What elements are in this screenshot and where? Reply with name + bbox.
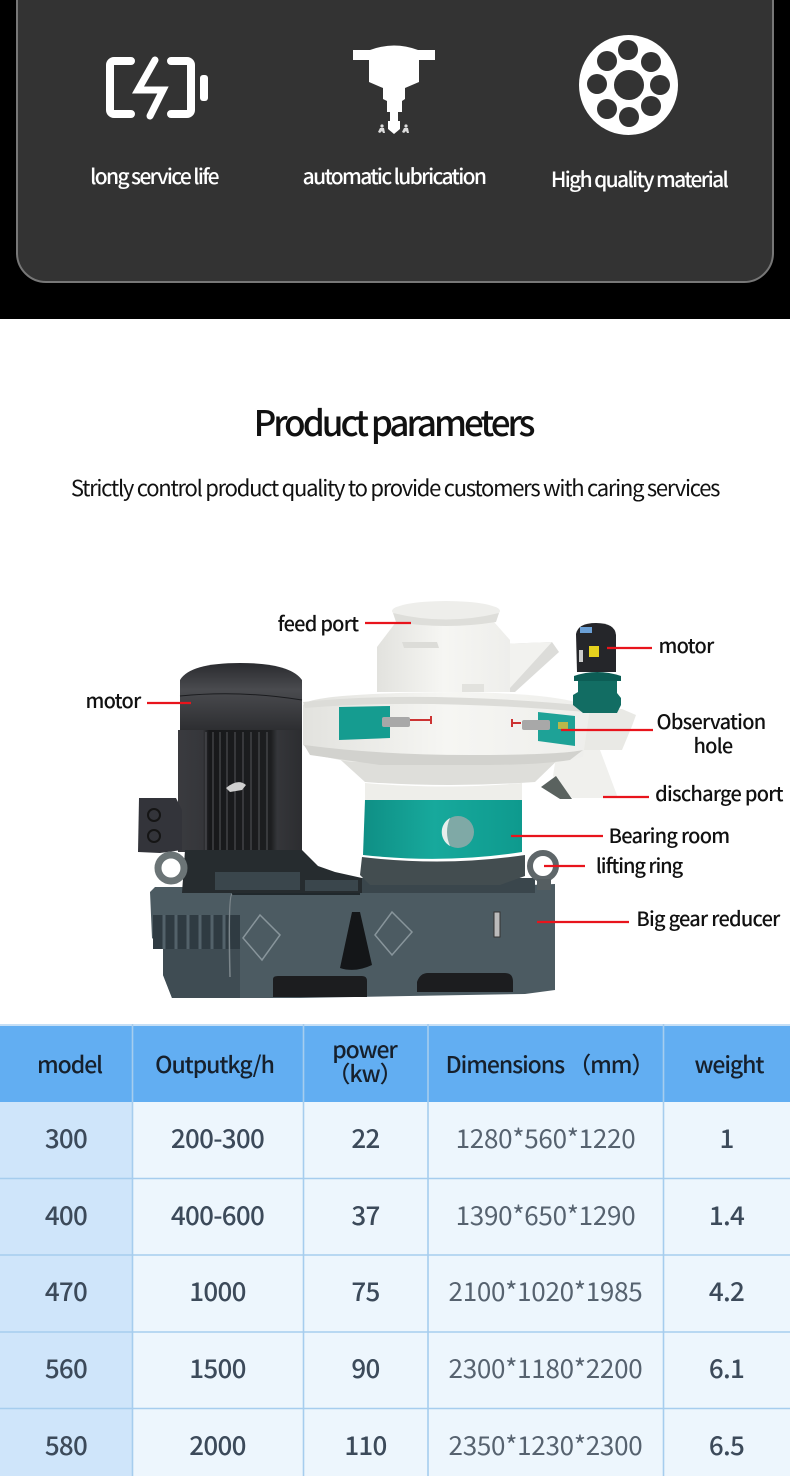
parameter table: 1390*650*1290 xyxy=(456,1196,635,1233)
callout: motor right: motor xyxy=(658,630,714,659)
parameter table: 2350*1230*2300 xyxy=(449,1426,642,1463)
parameter table: 110 xyxy=(344,1426,387,1463)
parameter table: 22 xyxy=(351,1119,380,1156)
parameter table: weight xyxy=(695,1046,763,1080)
parameter table: 200-300 xyxy=(171,1119,264,1156)
table grid xyxy=(0,1024,790,1476)
machine illustration xyxy=(138,601,636,998)
label: high quality material: High quality material xyxy=(551,164,727,194)
row 560: 560 xyxy=(45,1349,87,1386)
grinding chamber xyxy=(303,601,636,804)
parameter table: 2000 xyxy=(189,1426,246,1463)
callout: big gear reducer: Big gear reducer xyxy=(636,903,780,932)
callout: feed port: feed port xyxy=(278,608,358,637)
callout lines xyxy=(147,622,653,924)
callout: lifting ring: lifting ring xyxy=(596,850,682,879)
parameter table: Outputkg/h xyxy=(155,1046,274,1080)
callout: observation hole: Observation xyxy=(656,706,765,735)
small motor xyxy=(573,623,621,713)
dark feature section xyxy=(0,0,790,319)
row 400: 400 xyxy=(45,1196,87,1233)
parameter table: 6.5 xyxy=(709,1426,744,1463)
parameter table: 75 xyxy=(351,1272,380,1309)
row 300: 300 xyxy=(45,1119,87,1156)
parameter table: 37 xyxy=(351,1196,380,1233)
callout: observation hole: hole xyxy=(694,730,732,759)
parameter table: 1 xyxy=(719,1119,734,1156)
icon: lubrication pump xyxy=(353,46,435,134)
parameter table: 2100*1020*1985 xyxy=(449,1272,642,1309)
callout: bearing room: Bearing room xyxy=(609,820,729,849)
gear reducer base xyxy=(150,878,555,998)
first column xyxy=(0,1102,132,1476)
row 580: 580 xyxy=(45,1426,87,1463)
bearing room xyxy=(360,800,556,890)
row 470: 470 xyxy=(45,1272,87,1309)
parameter table: Dimensions （mm） xyxy=(446,1046,653,1080)
label: long service life: long service life xyxy=(90,161,218,191)
header cells: model xyxy=(37,1046,102,1080)
subheading: Strictly control product quality to provide customers with caring services xyxy=(71,471,719,503)
icon: battery xyxy=(106,56,208,120)
parameter table: 400-600 xyxy=(171,1196,264,1233)
parameter table: （kw） xyxy=(327,1055,402,1089)
callout: motor left: motor xyxy=(85,685,140,714)
label: automatic lubrication: automatic lubrication xyxy=(303,161,485,191)
parameter table xyxy=(0,1024,790,1476)
parameter table: power xyxy=(332,1031,397,1065)
callout: observation hole xyxy=(656,706,765,759)
parameter table: 1500 xyxy=(189,1349,246,1386)
parameter table: 1.4 xyxy=(709,1196,744,1233)
callout: discharge port: discharge port xyxy=(655,778,783,807)
parameter table: 1280*560*1220 xyxy=(456,1119,635,1156)
motor large xyxy=(138,663,362,893)
parameter table: 2300*1180*2200 xyxy=(449,1349,642,1386)
parameter table: 1000 xyxy=(189,1272,246,1309)
parameter table: 6.1 xyxy=(709,1349,744,1386)
parameter table: 4.2 xyxy=(709,1272,744,1309)
table header xyxy=(0,1024,790,1102)
panel: features xyxy=(16,0,774,283)
heading: product parameters: Product parameters xyxy=(254,396,532,447)
parameter table: 90 xyxy=(351,1349,380,1386)
icon: bearing xyxy=(579,35,678,135)
